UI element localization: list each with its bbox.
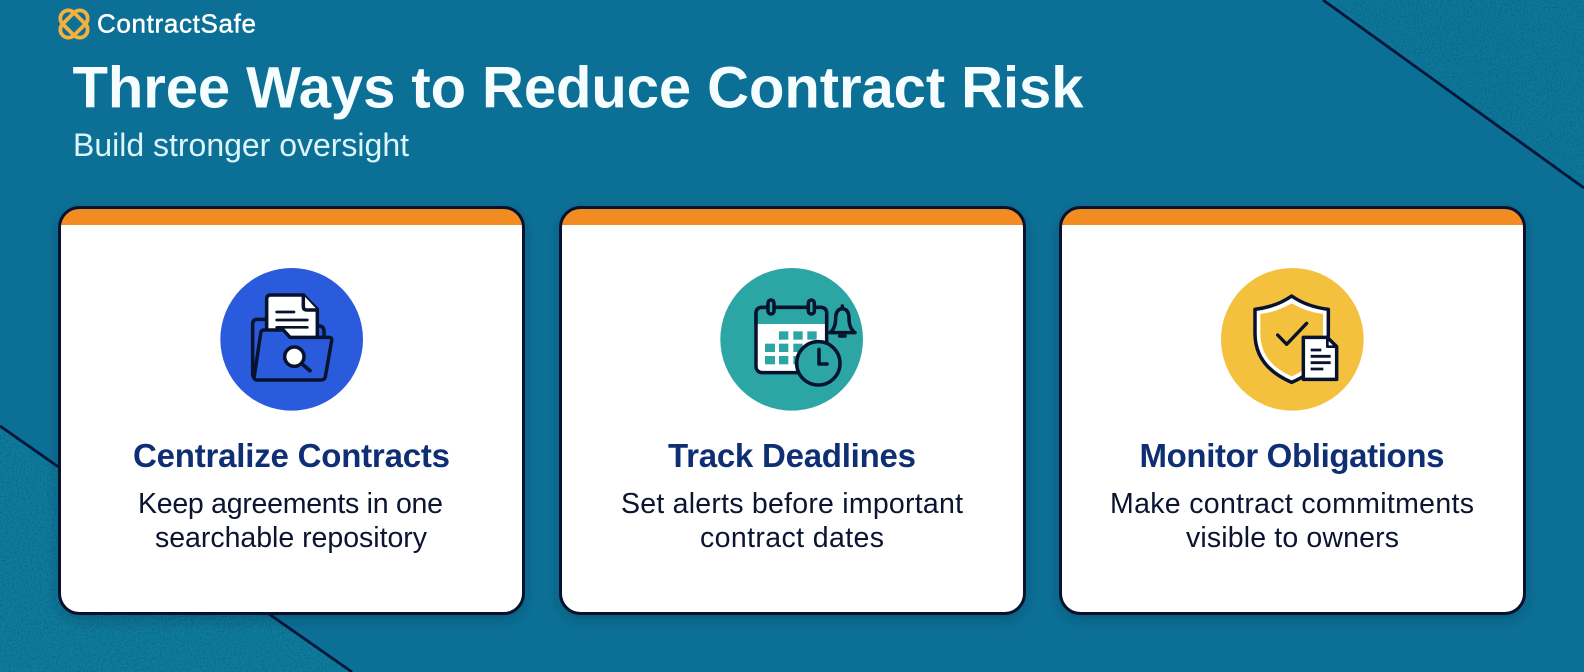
description: contract dates [700,522,884,554]
icon: shield with checkmark and document [1221,268,1364,411]
heading: Centralize Contracts [133,437,450,474]
panel: Monitor Obligations [1059,206,1526,614]
icon: interlocking logo mark [57,7,91,41]
description [1110,488,1474,554]
description: Keep agreements in one [138,488,443,520]
description [138,488,443,554]
heading: Track Deadlines [668,437,916,474]
description [621,488,963,554]
icon: calendar with clock and bell [720,268,863,411]
heading: Monitor Obligations [1140,437,1444,474]
logo: ContractSafe: ContractSafe [97,8,256,38]
description: Set alerts before important [621,488,963,520]
subtitle: Build stronger oversight [73,127,409,163]
title: Three Ways to Reduce Contract Risk [72,56,1084,120]
description: searchable repository [155,522,428,554]
panel: Track Deadlines [559,206,1026,614]
description: visible to owners [1186,522,1399,554]
description: Make contract commitments [1110,488,1474,520]
icon: folder with document and magnifier [220,268,363,411]
panel: Centralize Contracts [58,206,525,614]
